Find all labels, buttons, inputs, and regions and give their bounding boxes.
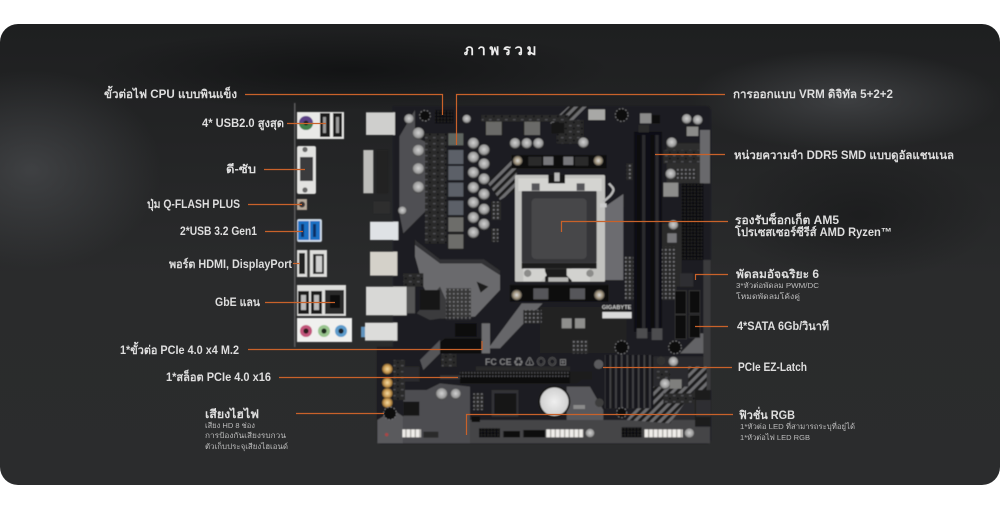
callout: GbE LAN: GbE แลน <box>215 297 260 309</box>
callout: SATA: 4*SATA 6Gb/วินาที <box>737 320 829 333</box>
callout: PCIe x16: 1*สล็อต PCIe 4.0 x16 <box>166 369 271 384</box>
bottom headers <box>402 390 711 438</box>
callout: HDMI DisplayPort: พอร์ต HDMI, DisplayPort <box>169 257 292 271</box>
callout: USB 3.2: 2*USB 3.2 Gen1 <box>180 226 258 238</box>
callout: RGB: 1*หัวต่อไฟ LED RGB <box>740 433 810 442</box>
capacitors <box>398 114 703 438</box>
icon: USB 3.2 ports <box>297 219 322 242</box>
icon: HDMI and DisplayPort <box>297 250 327 278</box>
callout: AM5: รองรับซ็อกเก็ต AM5 <box>735 212 840 227</box>
callout: M.2 <box>120 341 482 357</box>
icon: D-Sub port <box>297 146 316 194</box>
component clusters <box>393 115 700 410</box>
M.2 connector <box>440 323 490 367</box>
callout: Smart Fan 6: พัดลมอัจฉริยะ 6 <box>736 268 819 281</box>
board PCB <box>377 106 711 444</box>
grey board accents <box>377 110 711 443</box>
callout: RGB <box>466 406 855 442</box>
callout: USB2.0: 4* USB2.0 สูงสุด <box>202 118 284 131</box>
callout: D-Sub: ดี-ซับ <box>226 163 256 176</box>
callout: RGB: ฟิวชั่น RGB <box>739 406 795 422</box>
callout: VRM <box>456 88 893 145</box>
icon: audio jacks <box>297 318 352 342</box>
callout: Hi-Fi audio: เสียงไฮไฟ <box>205 407 259 421</box>
icon: USB and LAN ports <box>297 285 346 316</box>
callout: Hi-Fi audio <box>205 407 384 451</box>
PCIe slot <box>440 367 592 383</box>
callout: CPU power <box>104 85 442 115</box>
SATA ports <box>675 291 700 339</box>
top socket bracket <box>512 155 607 168</box>
regulatory marks: FC CE ♻ ⚠ ◎ ◎ ⊞ <box>485 357 567 367</box>
ATX power connector <box>682 183 703 260</box>
GIGABYTE logo: GIGABYTE <box>602 305 632 311</box>
callout: D-Sub <box>226 163 305 176</box>
callout: GbE LAN <box>215 297 335 309</box>
DIMM slots <box>634 125 662 340</box>
CPU power connector <box>435 110 453 123</box>
icon: Q-FLASH PLUS button <box>297 199 307 210</box>
callout: SATA <box>695 320 829 333</box>
callout: AM5: โปรเซสเซอร์ซีรีส์ AMD Ryzen™ <box>734 224 892 239</box>
callout: Smart Fan 6: 3*หัวต่อพัดลม PWM/DC <box>736 281 820 290</box>
socket lever <box>600 183 613 207</box>
battery <box>538 386 585 418</box>
callout: Hi-Fi audio: ตัวเก็บประจุเสียงไฮเอนด์ <box>205 441 288 451</box>
title: ภาพรวม <box>464 42 540 59</box>
motherboard <box>361 106 711 444</box>
callout: RGB: 1*หัวต่อ LED ที่สามารถระบุที่อยู่ได้ <box>740 421 855 431</box>
VRM chokes <box>448 133 463 249</box>
callout: Hi-Fi audio: เสียง HD 8 ช่อง <box>205 421 255 430</box>
heatsink <box>594 355 665 408</box>
small chips <box>486 109 698 389</box>
audio gold connectors <box>382 364 393 408</box>
callout: M.2: 1*ขั้วต่อ PCIe 4.0 x4 M.2 <box>120 341 239 357</box>
callout: VRM: การออกแบบ VRM ดิจิทัล 5+2+2 <box>733 88 893 101</box>
callout: USB2.0 <box>202 118 326 131</box>
callout: PCIe EZ-Latch: PCIe EZ-Latch <box>738 362 807 374</box>
rear IO panel <box>294 103 352 347</box>
callout: Hi-Fi audio: การป้องกันเสียงรบกวน <box>205 431 286 440</box>
bottom socket bracket <box>510 285 608 302</box>
callout: Smart Fan 6 <box>696 268 820 301</box>
callout: CPU power: ขั้วต่อไฟ CPU แบบพินแข็ง <box>104 85 237 101</box>
stripes <box>487 107 707 423</box>
callout: Smart Fan 6: โหมดพัดลมโค้งคู่ <box>736 292 800 301</box>
callout: AM5 <box>562 212 892 239</box>
callout: Q-FLASH PLUS: ปุ่ม Q-FLASH PLUS <box>147 198 240 212</box>
mounting holes <box>384 109 681 420</box>
AM5 socket <box>515 173 605 282</box>
icon: PS/2 and USB2.0 ports <box>297 112 344 139</box>
IO connectors on board <box>361 112 415 341</box>
controller chips <box>385 367 518 436</box>
GIGABYTE logo <box>602 305 632 318</box>
callout: DDR5: หน่วยความจำ DDR5 SMD แบบดูอัลแชนเนล <box>734 148 954 163</box>
